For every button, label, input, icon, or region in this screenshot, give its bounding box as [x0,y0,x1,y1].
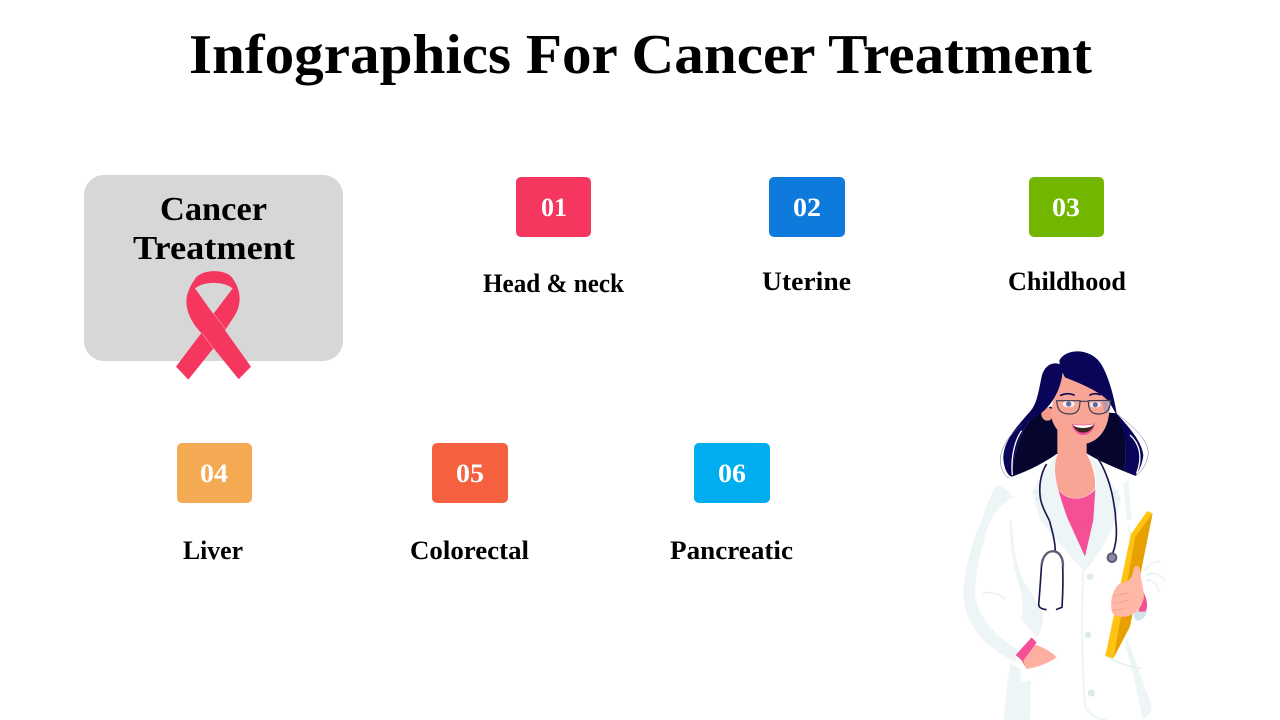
doctor upper body and head [982,351,1148,520]
main hair [1059,351,1143,476]
badge 06: 06 [718,459,746,488]
illustration: doctor [963,351,1164,720]
item 05: colorectal [410,443,529,565]
badge 01 [516,177,591,237]
item 03: childhood [1008,177,1127,296]
coat upper [982,485,1013,520]
item 01: head and neck [483,177,625,298]
folder [1105,511,1153,658]
title: Infographics For Cancer Treatment [189,24,1092,86]
label uterine: Uterine [762,267,851,296]
right hand and cuff [1111,566,1147,621]
mouth [1072,423,1095,435]
panel: cancer treatment [84,175,343,380]
lapels [1032,455,1068,520]
left hand and cuff [1016,637,1057,669]
panel heading: Treatment [133,230,296,267]
badge 04: 04 [200,459,228,488]
panel heading: Cancer [160,191,267,228]
badge 02: 02 [793,193,821,222]
glasses [1057,400,1111,414]
badge 03: 03 [1052,193,1080,222]
badge 01: 01 [541,193,567,222]
label colorectal: Colorectal [410,536,529,565]
item 04: liver [177,443,252,565]
badge 05: 05 [456,459,484,488]
item 02: uterine [762,177,851,296]
face [1051,375,1109,444]
label pancreatic: Pancreatic [670,536,793,565]
stethoscope tube [1040,457,1116,520]
stethoscope [1039,520,1117,610]
icon: awareness ribbon [176,271,251,380]
neck [1055,425,1095,498]
ear [1041,407,1053,421]
back hair [1012,407,1135,477]
label liver: Liver [183,536,243,565]
item 06: pancreatic [670,443,793,565]
label head and neck: Head & neck [483,269,625,298]
eyebrows [1061,394,1100,395]
label childhood: Childhood [1008,267,1127,296]
eyes [1063,401,1101,408]
pink shirt [1058,489,1095,520]
doctor coat lower [963,511,1164,720]
panel heading [133,191,296,267]
pink shirt lower [1068,520,1093,557]
